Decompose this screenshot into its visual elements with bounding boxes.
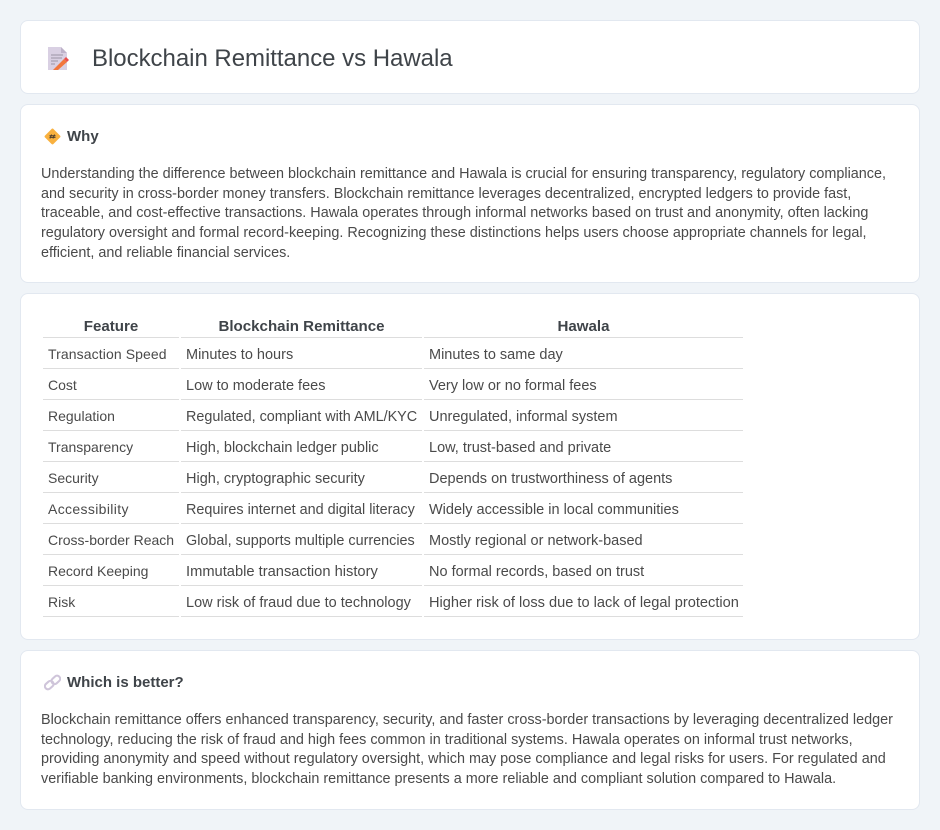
text block: why: regulatory oversight and formal record-keeping. Recognizing these distinctions helps users choose appropriate channels for legal,	[41, 225, 867, 241]
text block: why: Understanding the difference between blockchain remittance and Hawala is crucial for ensuring transparency, regulatory compliance,	[41, 166, 886, 182]
comparison table: High, blockchain ledger public	[186, 440, 379, 456]
comparison table: Risk	[48, 594, 75, 610]
comparison table: Low to moderate fees	[186, 378, 325, 394]
comparison table: Immutable transaction history	[186, 564, 378, 580]
comparison table: Cost	[48, 377, 77, 393]
panel: which is better	[20, 650, 920, 810]
icon: link	[44, 674, 61, 690]
panel: why	[20, 104, 920, 283]
comparison table: No formal records, based on trust	[429, 564, 644, 580]
heading: why: Why	[67, 128, 99, 145]
comparison table: Transparency	[48, 439, 133, 455]
comparison table: Higher risk of loss due to lack of legal protection	[429, 595, 739, 611]
comparison table: Very low or no formal fees	[429, 378, 597, 394]
comparison table: Low risk of fraud due to technology	[186, 595, 411, 611]
comparison table: Global, supports multiple currencies	[186, 533, 415, 549]
comparison table: Minutes to same day	[429, 347, 563, 363]
text block: why: and security in cross-border money transfers. Blockchain remittance leverages decentralized, encrypted ledgers to provide fast,	[41, 186, 851, 202]
panel: header	[20, 20, 920, 94]
comparison table: Mostly regional or network-based	[429, 533, 643, 549]
comparison table: Low, trust-based and private	[429, 440, 611, 456]
comparison table	[43, 318, 743, 617]
comparison table: Transaction Speed	[48, 346, 167, 362]
comparison table: Regulated, compliant with AML/KYC	[186, 409, 417, 425]
comparison table: Record Keeping	[48, 563, 148, 579]
comparison table: Accessibility	[48, 501, 129, 517]
text block: which is better: Blockchain remittance offers enhanced transparency, security, and faster cross-border transactions by leveraging decentralized ledger	[41, 712, 893, 728]
comparison table: Hawala	[557, 318, 610, 334]
comparison table: Unregulated, informal system	[429, 409, 618, 425]
icon: document with pencil	[48, 47, 69, 70]
comparison table: Depends on trustworthiness of agents	[429, 471, 672, 487]
text block: why	[41, 166, 886, 261]
text block: why: efficient, and reliable financial services.	[41, 245, 290, 261]
text block: which is better: verifiable banking environments, blockchain remittance presents a more reliable and compliant solution compared to Hawala.	[41, 771, 836, 787]
icon: diamond sign	[44, 128, 60, 144]
text block: which is better	[41, 712, 893, 787]
comparison table: Cross-border Reach	[48, 532, 174, 548]
comparison table: Regulation	[48, 408, 115, 424]
comparison table: High, cryptographic security	[186, 471, 365, 487]
title: Blockchain Remittance vs Hawala	[92, 45, 453, 72]
heading: which is better: Which is better?	[67, 674, 184, 691]
comparison table: Minutes to hours	[186, 347, 293, 363]
panel: comparison table	[20, 293, 920, 640]
text block: which is better: providing anonymity and speed without regulatory oversight, which may pose compliance and legal risks for users. For regulated and	[41, 751, 886, 767]
comparison table: Blockchain Remittance	[218, 318, 385, 334]
comparison table: Widely accessible in local communities	[429, 502, 679, 518]
comparison table: Security	[48, 470, 99, 486]
text block: which is better: technology, reducing the risk of fraud and high fees common in traditional systems. Hawala operates on informal trust networks,	[41, 732, 853, 748]
text block: why: traceable, and cost-effective transactions. Hawala operates through informal networks based on trust and anonymity, often lacking	[41, 205, 868, 221]
comparison table: Requires internet and digital literacy	[186, 502, 415, 518]
comparison table: Feature	[84, 318, 138, 334]
